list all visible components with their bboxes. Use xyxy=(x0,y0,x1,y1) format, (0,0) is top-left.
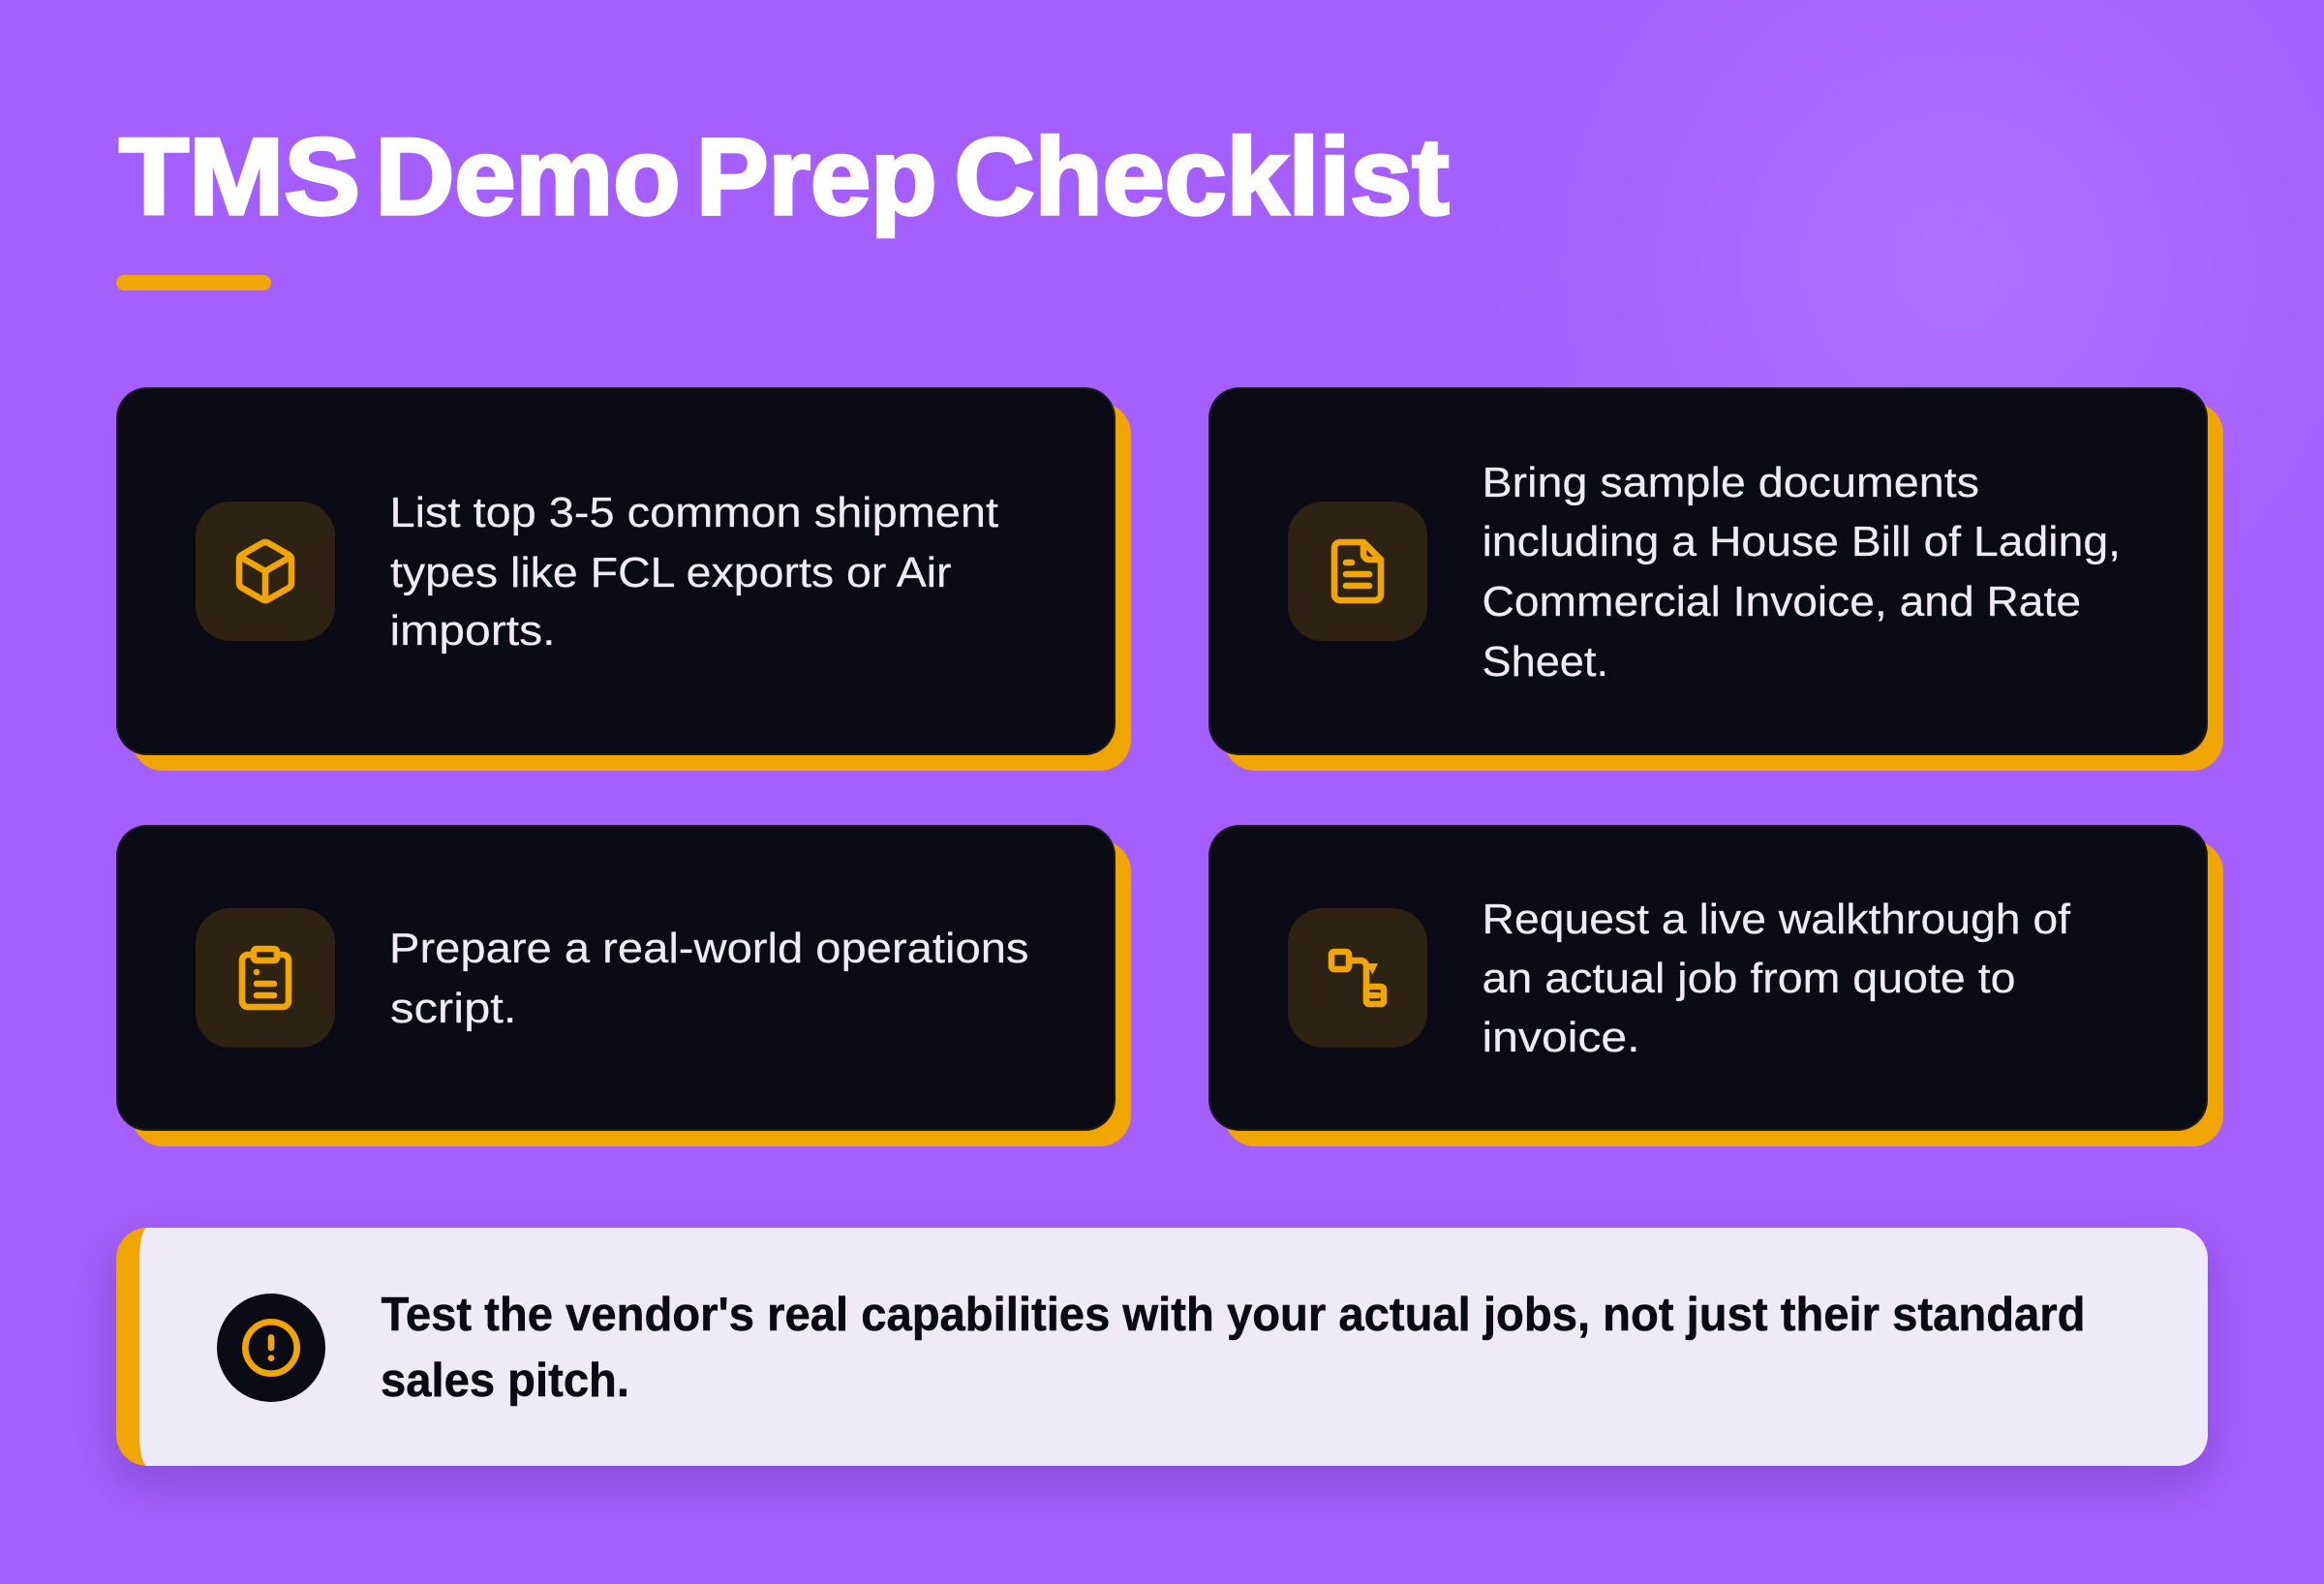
callout text xyxy=(381,1289,2086,1407)
icon: box xyxy=(196,502,335,641)
callout text: Test the vendor's real capabilities with your actual jobs, not just their standard xyxy=(382,1289,2086,1341)
panel: live walkthrough xyxy=(1208,825,2208,1131)
title: Checklist xyxy=(955,116,1449,237)
title: Demo xyxy=(376,116,680,237)
text: operations script xyxy=(389,925,1028,1032)
icon: document xyxy=(1288,502,1427,641)
icon: alert xyxy=(217,1294,325,1402)
title: Prep xyxy=(696,116,937,237)
panel: shipment types xyxy=(116,387,1116,755)
text: live walkthrough: an actual job from quote to xyxy=(1482,955,2016,1002)
text: sample documents: Bring sample documents xyxy=(1482,459,1979,506)
text: live walkthrough: invoice. xyxy=(1482,1014,1640,1061)
icon: workflow xyxy=(1288,908,1427,1048)
text: sample documents xyxy=(1482,459,2121,685)
panel: sample documents xyxy=(1208,387,2208,755)
text: operations script: Prepare a real-world operations xyxy=(389,925,1028,972)
text: operations script: script. xyxy=(390,985,517,1032)
title accent bar xyxy=(116,275,271,290)
title xyxy=(118,116,1450,238)
text: live walkthrough xyxy=(1482,896,2071,1061)
title: TMS xyxy=(119,116,360,237)
text: shipment types: imports. xyxy=(389,607,556,655)
text: sample documents: Commercial Invoice, and Rate xyxy=(1482,578,2081,625)
text: live walkthrough: Request a live walkthrough of xyxy=(1482,896,2071,943)
panel: operations script xyxy=(116,825,1116,1131)
callout xyxy=(116,1228,2208,1466)
text: sample documents: including a House Bill of Lading, xyxy=(1482,518,2121,565)
callout text: sales pitch. xyxy=(381,1355,629,1407)
text: sample documents: Sheet. xyxy=(1482,638,1608,685)
text: shipment types: List top 3-5 common shipment xyxy=(389,489,998,536)
icon: clipboard xyxy=(196,908,335,1048)
text: shipment types: types like FCL exports or Air xyxy=(390,549,951,596)
text: shipment types xyxy=(389,489,998,655)
